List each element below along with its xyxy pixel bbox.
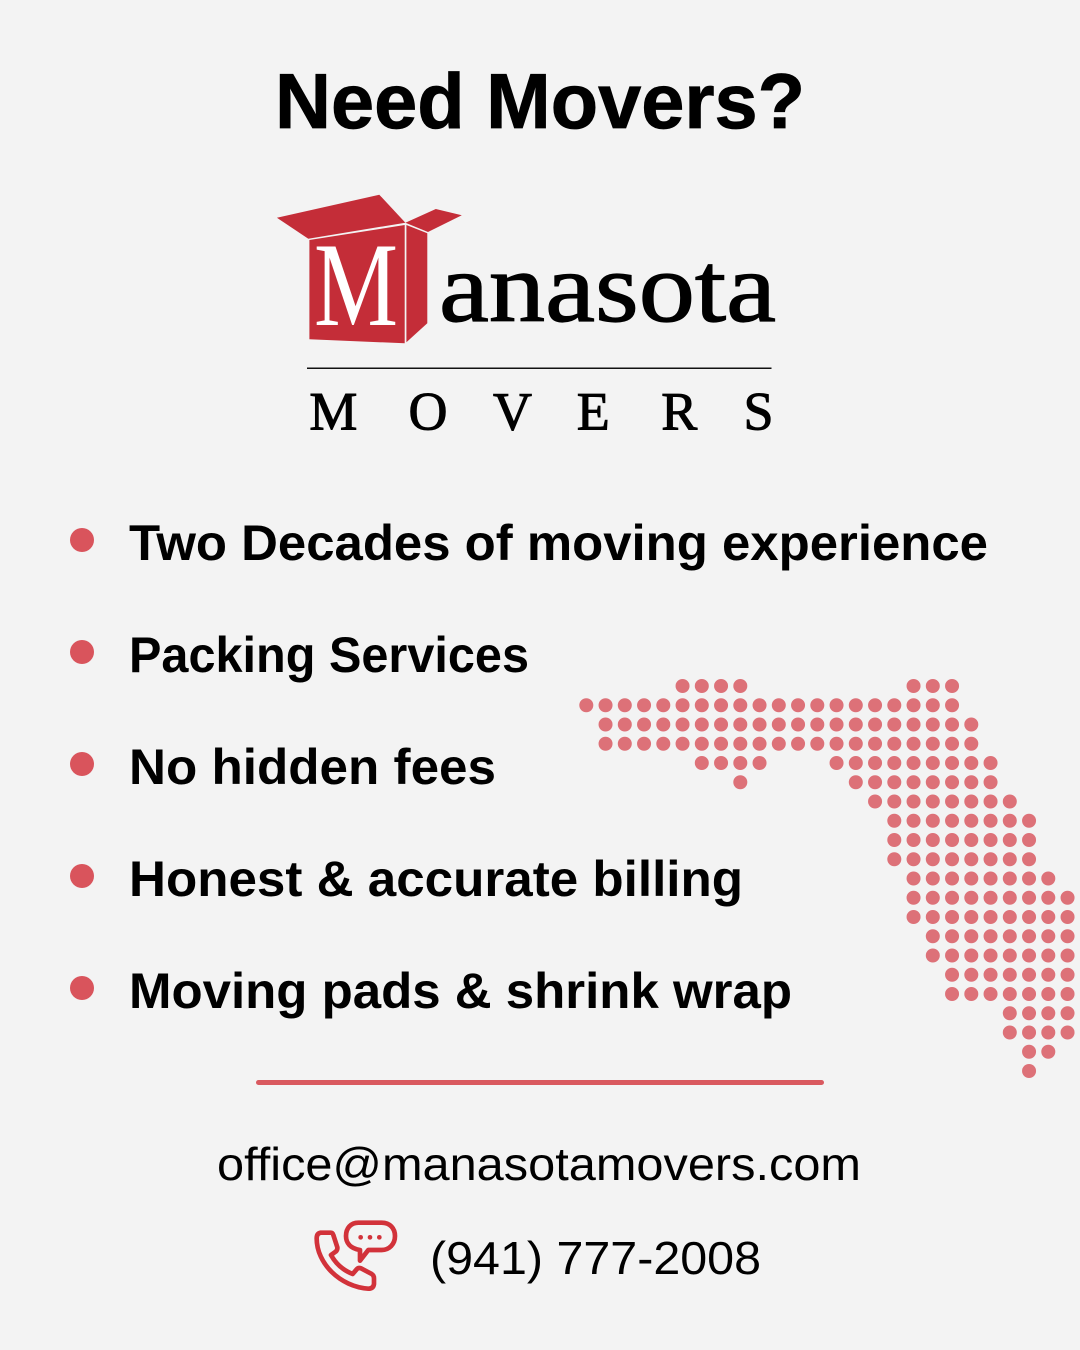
logo divider line <box>307 368 772 369</box>
list item: fees: No hidden fees <box>129 739 496 795</box>
logo wordmark: movers: MOVERS <box>309 382 774 442</box>
contact email: office@manasotamovers.com <box>217 1138 861 1190</box>
icon: open red box with M <box>277 195 462 351</box>
divider <box>256 1080 824 1085</box>
contact phone: (941) 777-2008 <box>430 1232 761 1284</box>
icon: phone with speech bubble <box>317 1223 395 1289</box>
dotted map of Florida <box>586 686 1069 1071</box>
icon: open red box with M: M <box>314 218 398 351</box>
list item: experience: Two Decades of moving experience <box>129 515 988 571</box>
logo: Manasota Movers <box>277 195 776 442</box>
list item: packing: Packing Services <box>129 627 529 683</box>
list: services <box>70 515 988 1019</box>
logo wordmark: anasota: anasota <box>439 232 776 343</box>
title: Need Movers? <box>275 57 805 145</box>
list item: pads: Moving pads & shrink wrap <box>129 963 792 1019</box>
list item: billing: Honest & accurate billing <box>129 851 743 907</box>
